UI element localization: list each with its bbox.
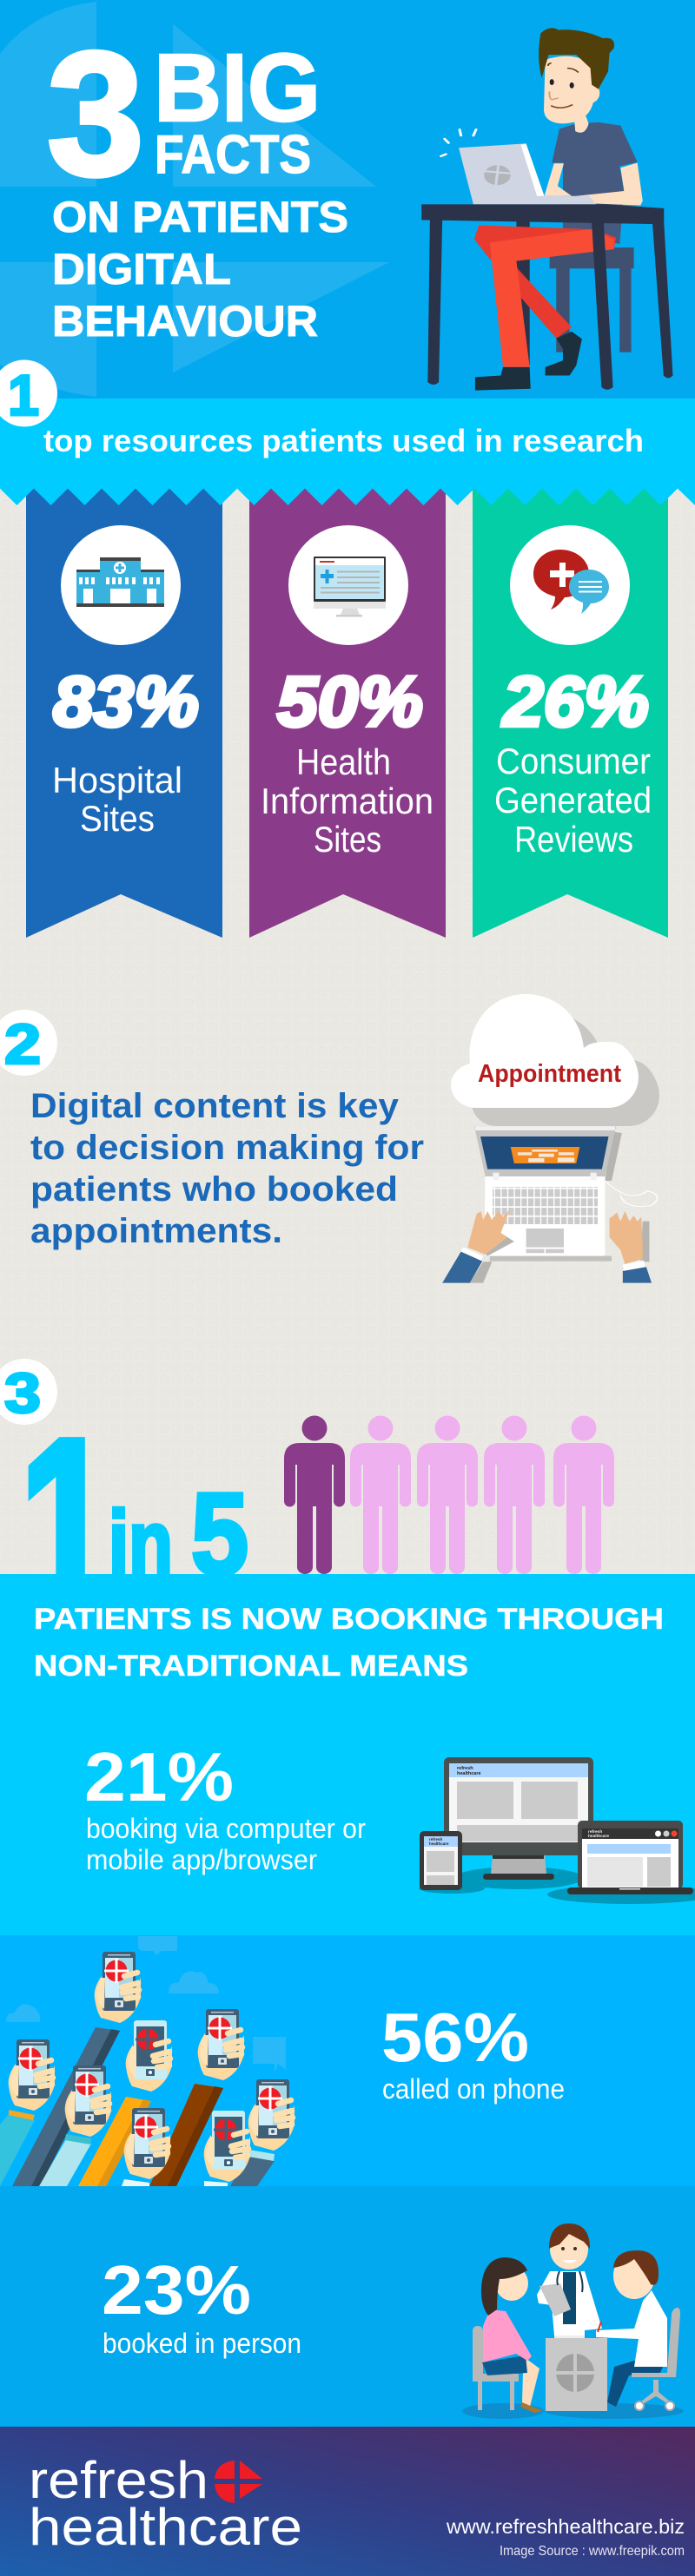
hand holding phone	[95, 1952, 141, 2023]
heading: top resources: top resources patients used in research	[43, 423, 644, 458]
label: booking via computer: booking via computer or	[86, 1813, 366, 1844]
number badge 1: 1	[8, 363, 39, 427]
website: www.refreshhealthcare.biz	[446, 2515, 685, 2538]
stat: 21%: 21%	[84, 1738, 234, 1815]
illustration: devices: refresh	[588, 1829, 602, 1835]
illustration: man at desk with laptop	[421, 28, 672, 391]
label: health information sites: Health	[296, 741, 391, 782]
heading: non-traditional means: NON-TRADITIONAL MEANS	[34, 1650, 468, 1683]
number badge 3: 3	[4, 1361, 41, 1425]
illustration: devices: refresh	[429, 1837, 443, 1841]
label: health information sites	[261, 741, 434, 860]
hand holding phone	[9, 2039, 55, 2111]
number badge 2	[0, 1010, 57, 1076]
text: digital content is key: to decision making for	[30, 1129, 424, 1167]
stat: 26%: 26%	[501, 662, 649, 741]
stat: 56%: 56%	[381, 1999, 529, 2076]
illustration: devices: healthcare	[429, 1841, 449, 1846]
hand holding phone	[198, 2009, 244, 2080]
label: hospital sites	[52, 760, 182, 839]
title: FACTS	[155, 125, 311, 185]
hand holding phone	[126, 2020, 172, 2092]
pictogram: five people, one highlighted	[284, 1415, 614, 1574]
title: ON PATIENTS	[52, 193, 348, 241]
title: BIG	[154, 35, 321, 142]
label: booking via computer: mobile app/browser	[86, 1844, 317, 1875]
panel: footer	[0, 2427, 695, 2576]
number badge 2: 2	[4, 1012, 41, 1076]
heading: non-traditional means: PATIENTS IS NOW BOOKING THROUGH	[34, 1603, 664, 1636]
hand holding phone	[124, 2108, 170, 2179]
panel: booking via computer	[0, 1574, 695, 1935]
label: consumer generated reviews: Consumer	[496, 741, 651, 781]
label: consumer generated reviews: Reviews	[514, 819, 633, 860]
panel: ribbon health information sites	[249, 473, 446, 938]
stat: 50%: 50%	[277, 662, 423, 741]
illustration: devices: healthcare	[588, 1834, 609, 1839]
label: health information sites: Sites	[314, 819, 381, 860]
logo: refresh healthcare	[29, 2451, 302, 2556]
stat: 23%: 23%	[102, 2251, 251, 2329]
big stat: 1 in 5	[20, 1390, 248, 1655]
label: called on phone: called on phone	[382, 2073, 565, 2105]
hand holding phone	[204, 2111, 250, 2182]
big stat: 1 in 5: 5	[191, 1470, 248, 1599]
text: digital content is key: Digital content is key	[30, 1087, 400, 1125]
panel: fact 1 banner	[0, 399, 695, 505]
label: consumer generated reviews	[494, 741, 652, 860]
sleeves	[0, 2027, 275, 2186]
heading: non-traditional means	[34, 1603, 664, 1683]
text: digital content is key: patients who booked	[30, 1170, 398, 1209]
label: hospital sites: Sites	[80, 798, 155, 839]
icon: monitor	[288, 525, 408, 645]
illustration: devices	[419, 1757, 695, 1904]
big stat: 1 in 5: 1	[20, 1390, 113, 1655]
title	[47, 16, 348, 346]
decorative clouds and speech bubbles	[6, 1936, 286, 2073]
label: consumer generated reviews: Generated	[494, 780, 652, 820]
icon: hospital	[61, 525, 181, 645]
title: DIGITAL	[52, 245, 231, 293]
label: booked in person: booked in person	[103, 2328, 301, 2359]
label: hospital sites: Hospital	[52, 760, 182, 800]
text: digital content is key	[30, 1087, 424, 1250]
big stat: 1 in 5: in	[109, 1492, 173, 1594]
logo: refresh healthcare: refresh	[29, 2451, 208, 2509]
hand holding phone	[248, 2079, 295, 2151]
label: health information sites: Information	[261, 781, 434, 821]
icon: speech bubbles	[510, 525, 630, 645]
number badge 1	[0, 359, 57, 427]
label: booking via computer	[86, 1813, 366, 1875]
title: 3	[47, 16, 144, 213]
number badge 3	[0, 1359, 57, 1425]
panel: ribbon hospital sites	[26, 473, 222, 938]
stat: 83%: 83%	[53, 662, 199, 741]
logo: refresh healthcare: healthcare	[29, 2498, 302, 2556]
illustration: doctors with patient	[462, 2224, 684, 2419]
panel: ribbon consumer generated reviews	[473, 473, 668, 938]
label: appointment: Appointment	[478, 1060, 621, 1088]
page background texture	[0, 399, 695, 1579]
hand holding phone	[65, 2065, 111, 2137]
panel: header	[0, 0, 695, 399]
title: BEHAVIOUR	[52, 297, 318, 346]
panel: called on phone	[0, 1935, 695, 2186]
text: digital content is key: appointments.	[30, 1212, 282, 1250]
panel: booked in person	[0, 2186, 695, 2427]
illustration: appointment cloud and laptop	[442, 994, 659, 1283]
illustration: devices: healthcare	[457, 1771, 481, 1776]
illustration: devices: refresh	[457, 1766, 473, 1771]
